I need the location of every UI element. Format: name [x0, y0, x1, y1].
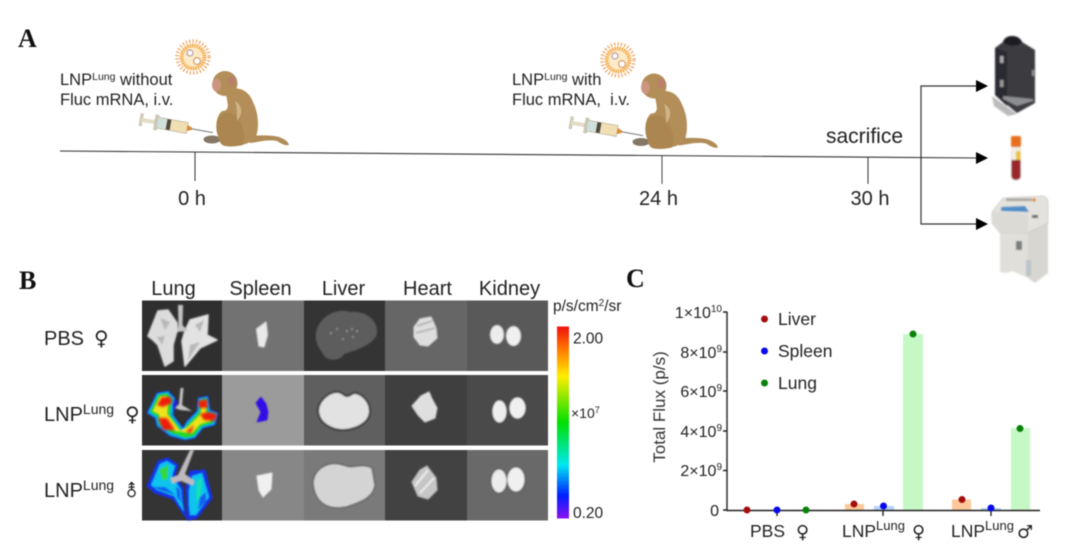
- icon: blood tube: [1011, 136, 1021, 180]
- y tick labels: 9: [716, 462, 722, 473]
- row labels: ♀: [125, 402, 140, 426]
- legend: Liver: [778, 309, 816, 329]
- text: LNP with mRNA: Fluc mRNA, i.v.: [512, 91, 630, 109]
- icon: monkey 0 h: [204, 71, 289, 146]
- row labels: [44, 326, 140, 502]
- panel: B organ imaging: [19, 266, 621, 522]
- colour scale bar: 0.20: [573, 505, 604, 522]
- tick: 0 h: 0 h: [178, 188, 206, 210]
- y tick labels: 10: [711, 304, 722, 315]
- branch arrows: [921, 80, 988, 230]
- text: LNP with mRNA: with: [567, 71, 601, 89]
- timeline arrow: [60, 151, 988, 164]
- text: LNP without mRNA: LNP: [60, 71, 92, 89]
- tick: 24 h: 24 h: [639, 188, 678, 210]
- row labels: PBS: [44, 328, 84, 350]
- row labels: Lung: [83, 477, 114, 493]
- text: LNP without mRNA: Lung: [92, 71, 116, 83]
- y tick labels: 2×10: [680, 463, 716, 480]
- icon: imaging system: [992, 36, 1035, 116]
- row labels: LNP: [44, 480, 83, 502]
- organs row LNP female: [147, 388, 526, 440]
- y tick labels: 6×10: [680, 384, 716, 401]
- x axis labels: ♀: [912, 522, 925, 543]
- column headers: Kidney: [479, 278, 540, 300]
- panel: C bar chart total flux: [626, 264, 1040, 543]
- column headers: Heart: [403, 278, 452, 300]
- colour scale bar: ×10: [571, 405, 595, 421]
- y tick labels: 9: [716, 423, 722, 434]
- panel letter B: B: [19, 266, 36, 295]
- y tick labels: 1×10: [675, 305, 711, 322]
- x axis labels: Lung: [876, 518, 905, 533]
- colour scale bar: 7: [595, 405, 600, 415]
- icon: monkey 24 h: [632, 74, 718, 149]
- colour scale bar: [553, 298, 621, 522]
- text: LNP with mRNA: LNP: [512, 71, 544, 89]
- column headers: Lung: [151, 278, 196, 300]
- y tick labels: 8×10: [680, 345, 716, 362]
- x axis labels: LNP: [842, 521, 876, 541]
- icon: cryostat: [992, 196, 1048, 283]
- column headers: Liver: [322, 278, 366, 300]
- tick: 30 h sacrifice: 30 h: [851, 188, 889, 210]
- y tick labels: 4×10: [680, 424, 716, 441]
- text: LNP without mRNA: Fluc mRNA, i.v.: [60, 91, 173, 109]
- tick: 0 h: [178, 152, 206, 210]
- row labels: Lung: [83, 401, 114, 417]
- data points: [744, 330, 1024, 514]
- colour scale bar: /sr: [604, 298, 621, 315]
- y tick labels: 9: [716, 383, 722, 394]
- legend: Spleen: [778, 341, 832, 361]
- tick: 30 h sacrifice: sacrifice: [826, 125, 903, 148]
- colour scale bar: 2: [599, 298, 605, 309]
- legend: [761, 309, 832, 393]
- panel letter C: C: [626, 264, 645, 293]
- colour scale bar: 2.00: [573, 330, 604, 348]
- colour scale bar: p/s/cm: [553, 298, 599, 315]
- row labels: LNP: [44, 404, 83, 426]
- panel letter A: A: [18, 24, 37, 53]
- x axis labels: Lung: [985, 518, 1014, 533]
- icon: syringe 24 h: [569, 115, 644, 143]
- x axis labels: ♂: [1017, 522, 1033, 543]
- tick: 30 h sacrifice: [826, 125, 903, 210]
- x axis labels: [750, 518, 1033, 543]
- row labels: ♀: [94, 326, 109, 350]
- y tick labels: 9: [716, 344, 722, 355]
- organs row PBS: [148, 305, 521, 366]
- y tick labels: [675, 304, 722, 520]
- column headers: Spleen: [229, 278, 292, 300]
- text: LNP without mRNA: without: [115, 71, 173, 89]
- legend: Lung: [778, 373, 817, 393]
- text: LNP with mRNA: Lung: [544, 71, 568, 83]
- panel: A experimental timeline: [18, 24, 1048, 283]
- row labels: ⚨: [124, 481, 139, 502]
- y axis title: Total Flux (p/s): [650, 351, 669, 463]
- icon: nanoparticle 24 h: [602, 44, 634, 76]
- x axis labels: LNP: [951, 521, 985, 541]
- image grid backgrounds: [142, 300, 548, 520]
- organs row LNP male: [147, 450, 525, 520]
- y tick labels: 0: [710, 503, 719, 520]
- tick: 24 h: [639, 155, 678, 210]
- icon: syringe 0 h: [139, 112, 214, 140]
- icon: nanoparticle 0 h: [177, 41, 209, 73]
- x axis labels: ♀: [796, 522, 809, 543]
- column headers: [151, 278, 540, 300]
- x axis labels: PBS: [750, 521, 785, 541]
- bars: [845, 334, 1030, 510]
- axes: [723, 312, 1040, 516]
